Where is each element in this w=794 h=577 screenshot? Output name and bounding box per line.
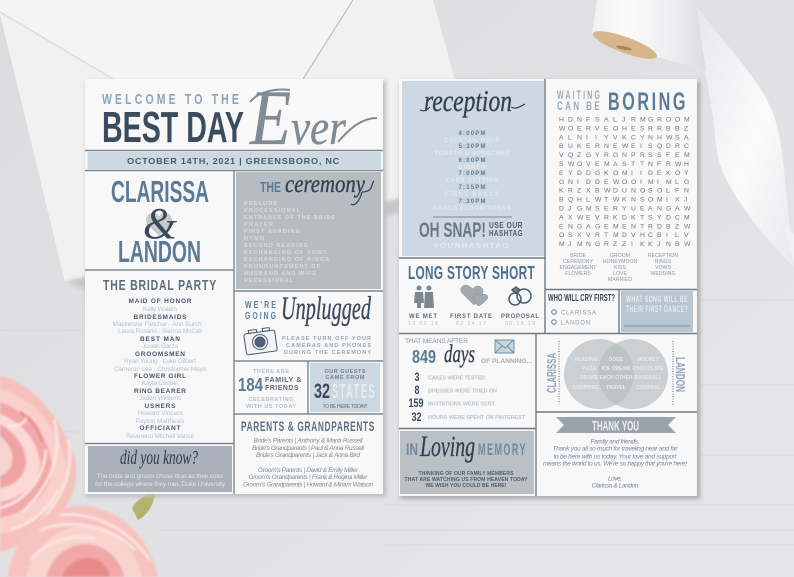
panel: planning stats: HOURS WERE SPENT ON PINTEREST (428, 415, 526, 421)
panel: parents and grandparents: Bride's Grandparents | Paul & Anna Russell (252, 445, 365, 452)
couple names: CLARISSA (111, 174, 209, 209)
panel: did you know: for the college where they met, Duke University (95, 481, 226, 488)
icon: envelope (495, 340, 514, 353)
word search grid: MJMNGRZZIKKJNBW (559, 241, 691, 248)
ribbon spool and tail (590, 0, 794, 268)
panel: the ceremony: HUSBAND AND WIFE (244, 271, 316, 277)
panel: planning stats: 3 (414, 370, 420, 384)
word list: GROOM (610, 253, 630, 259)
word search grid: ALNIIYVKCYNHWSA (559, 134, 689, 141)
panel: who will cry first: LANDON (561, 320, 590, 326)
panel: 184 family and friends (238, 369, 302, 410)
panel: the ceremony: EXCHANGING OF VOWS (244, 250, 327, 256)
panel: reception: reception (424, 83, 512, 118)
panel: in loving memory: Loving (419, 430, 475, 463)
envelope (0, 0, 455, 290)
panel: thank you (543, 417, 687, 490)
panel: unplugged: WE'RE (245, 299, 278, 311)
panel: bridal party: BEST MAN (140, 336, 180, 343)
panel: reception: #OURHASHTAG (434, 241, 510, 250)
panel: in loving memory: IN (406, 440, 418, 459)
panel: word search: BORING (608, 88, 688, 116)
panel: unplugged: PLEASE TURN OFF YOUR (282, 336, 371, 342)
panel: bridal party (103, 277, 217, 440)
panel: venn diagram: ICE CREAM (602, 366, 630, 372)
panel: parents and grandparents (241, 418, 375, 488)
panel: long story short: LONG STORY SHORT (408, 263, 535, 283)
panel: reception (402, 81, 544, 256)
panel: the ceremony: THE (260, 179, 281, 196)
leaf (132, 490, 155, 520)
panel: the ceremony: PRELUDE (244, 201, 277, 207)
word list (560, 253, 678, 283)
panel: did you know: The bride and groom chose blue as their color (96, 473, 224, 480)
panel: bridal party: THE BRIDAL PARTY (103, 277, 217, 294)
left card shadow (86, 81, 386, 497)
panel: bridal party: Reverend Mitchell Vance (126, 433, 194, 440)
panel: bridal party: Kelly Waters (143, 306, 178, 313)
panel: reception: 6:00PM (458, 158, 486, 164)
word list: BRIDE (570, 253, 586, 259)
panel: bridal party: RING BEARER (134, 388, 186, 395)
word list: RECEPTION (648, 253, 678, 259)
panel: first dance song: THEIR FIRST DANCE? (626, 304, 688, 315)
word search grid: BUKERNEWEISQDRC (559, 143, 689, 150)
panel: long story short: WE MET (409, 314, 437, 320)
panel: planning stats: INVITATIONS WERE SENT (428, 402, 496, 408)
panel: the ceremony: PROCESSIONAL (244, 208, 301, 214)
panel: bridal party: BRIDESMAIDS (134, 314, 187, 321)
panel: planning stats: CAKES WERE TESTED (428, 376, 485, 382)
panel: 32 states (310, 363, 380, 412)
panel: planning stats: 849 (412, 347, 436, 367)
date bar (88, 152, 381, 169)
panel: bridal party: Cameron Lee · Christopher Mays (114, 366, 207, 373)
panel: reception: HASHTAG (489, 229, 523, 238)
panel: left card (85, 74, 383, 494)
panel: reception: 7:15PM (458, 185, 486, 191)
panel: venn diagram: READING (574, 357, 598, 363)
panel: 32 states: TO BE HERE TODAY! (322, 404, 368, 410)
panel: planning stats: OF PLANNING... (481, 358, 532, 365)
word list: RINGS (655, 259, 672, 265)
panel: reception: 5:30PM (458, 144, 486, 150)
panel: bridal party: Howard Vincent (138, 410, 183, 417)
panel: the ceremony: ENTRANCE OF THE BRIDE (244, 215, 335, 221)
panel: bridal party: Mackenzie Fletcher · Ann Burch · (112, 321, 206, 328)
panel: 184 family and friends: THERE ARE (253, 369, 289, 375)
panel: venn diagram: CLARISSA (544, 353, 559, 393)
panel: unplugged (243, 291, 371, 356)
panel: unplugged: CAMERAS AND PHONES (286, 343, 371, 349)
panel: bridal party: USHERS (144, 403, 176, 410)
panel: reception: 7:30PM (458, 199, 486, 205)
panel: 184 family and friends: 184 (238, 375, 263, 395)
panel: thank you: Family and friends, (590, 438, 640, 446)
word list: CEREMONY (563, 259, 594, 265)
panel: long story short: 12.02.16 (408, 321, 438, 327)
panel: who will cry first (548, 293, 615, 326)
panel: bridal party: MAID OF HONOR (128, 298, 192, 305)
panel: venn diagram: CHOCOLATE (632, 366, 664, 372)
panel: 32 states: STATES (332, 381, 376, 403)
panel: reception: FIRST DANCE (445, 192, 499, 198)
panel: reception: TOASTS & SPEECHES (434, 151, 510, 157)
word list: WEDDING (650, 271, 676, 277)
panel: 184 family and friends: FRIENDS (265, 385, 299, 392)
panel: the ceremony: FIRST READING (244, 229, 300, 235)
panel: bridal party: Jaden Williams (139, 395, 182, 402)
icon: couple (414, 286, 434, 308)
panel: reception: 7:00PM (458, 171, 486, 177)
panel: venn diagram: DOGS (609, 357, 624, 363)
panel: bridal party: Payton Matthews (136, 418, 185, 425)
word search grid (559, 116, 691, 248)
panel: parents and grandparents: PARENTS & GRANDPARENTS (241, 418, 375, 434)
word search grid: ENGAGEMENTRDBZW (559, 223, 691, 230)
panel: venn diagram: PIZZA (582, 366, 597, 372)
panel: bridal party: Ryan Young · Luke Gilbert (124, 358, 196, 365)
panel: thank you: Thank you all so much for traveling near and far (552, 446, 678, 452)
word list: LOVE (613, 271, 627, 277)
panel: venn diagram: EACH OTHER (599, 375, 633, 381)
panel: bridal party: FLOWER GIRL (134, 373, 186, 380)
panel: long story short: 02.14.17 (456, 321, 486, 327)
panel: planning stats: THAT MEANS AFTER (405, 338, 468, 345)
word list: ENGAGEMENT (560, 265, 597, 271)
panel: venn diagram: HOCKEY (637, 357, 659, 363)
panel: venn diagram: TRAVEL (606, 385, 626, 391)
panel: the ceremony: EXCHANGING OF RINGS (244, 257, 329, 263)
panel: unplugged: GOING (245, 310, 278, 322)
panel: bridal party: GROOMSMEN (135, 351, 185, 358)
panel: word search: CAN BE (557, 99, 602, 113)
panel: planning stats: days (444, 341, 475, 368)
panel: planning stats: 159 (408, 396, 424, 410)
word search grid: GNIDDEWOOIMIMLG (559, 179, 689, 186)
roses (0, 376, 158, 577)
word search grid: AXWEVRKDKTSYDCM (559, 214, 690, 221)
panel: 184 family and friends: FAMILY & (265, 377, 302, 384)
panel: long story short: PROPOSAL (501, 314, 539, 320)
panel: parents and grandparents: Groom's Grandparents | Howard & Miriam Watson (243, 482, 373, 488)
word search grid: VQZGYRGNPRSSFEM (559, 152, 690, 159)
panel: reception: USE OUR (489, 221, 523, 230)
couple names: & (143, 199, 178, 248)
panel: did you know (88, 446, 232, 492)
panel: in loving memory: WE WISH YOU COULD BE HERE! (426, 483, 507, 489)
word search grid: WOERVEOHESRRBBZ (559, 125, 688, 132)
panel: bridal party: Laura Rosario · Sienna McCall (118, 328, 203, 335)
panel: in loving memory: THAT ARE WATCHING US FROM HEAVEN TODAY (404, 477, 528, 483)
panel: thank you: THANK YOU (592, 418, 639, 434)
panel: planning stats: 8 (414, 383, 420, 397)
panel: reception: OH SNAP! (419, 219, 486, 242)
panel: in loving memory: MEMORY (478, 440, 527, 459)
panel: the ceremony: SECOND READING (244, 243, 308, 249)
rose left (0, 376, 76, 552)
panel: right card (399, 79, 697, 496)
word search grid: HDNFSALJRMGROOM (559, 116, 690, 124)
panel: venn diagram: CAMPING (636, 385, 660, 391)
panel: the ceremony: HYMN (244, 236, 264, 242)
word list: MARRIED (608, 277, 632, 283)
panel: who will cry first: WHO WILL CRY FIRST? (548, 293, 615, 304)
panel: 32 states: OUR GUESTS (324, 369, 366, 375)
panel: bridal party: OFFICIANT (140, 425, 181, 432)
panel: planning stats: 32 (412, 410, 422, 424)
title: WELCOME TO THE (102, 91, 242, 108)
rose right (8, 506, 158, 577)
panel: in loving memory (400, 430, 534, 494)
panel: did you know: did you know? (120, 447, 198, 469)
panel: word search (557, 88, 691, 283)
word search grid: OSXVRTMDVHCBILV (559, 232, 689, 239)
word search grid: KRZXBWDUNOSOLFN (559, 188, 689, 195)
panel: thank you: to be here with us today. Your love and support (554, 454, 678, 460)
panel: bridal party: Kayla Cooper (142, 380, 179, 387)
panel: in loving memory: THINKING OF OUR FAMILY MEMBERS (418, 471, 514, 477)
word list: VOWS (655, 265, 671, 271)
word search grid: DJGMSERYUEANGAW (559, 206, 691, 212)
panel: thank you: Clarissa & Landon (592, 482, 639, 490)
panel: the ceremony: PRAYER (244, 222, 273, 228)
word list: FLOWERS (565, 271, 591, 277)
panel: first dance song: WHAT SONG WILL BE (626, 294, 688, 305)
panel: unplugged: Unplugged (281, 291, 371, 327)
panel: planning stats: DRESSES WERE TRIED ON (428, 388, 497, 394)
panel: long story short (408, 263, 539, 327)
panel: word search: WAITING (557, 88, 602, 102)
panel: the ceremony: RECESSIONAL (244, 278, 294, 284)
panel: 32 states: 32 (314, 380, 330, 403)
panel: long story short: FIRST DATE (450, 314, 492, 320)
panel: parents and grandparents: Bride's Parents | Anthony & Maria Russell (254, 438, 363, 444)
icon: camera (243, 327, 277, 355)
panel: venn diagram: BASEBALL (634, 375, 662, 381)
icon: hearts (461, 285, 488, 306)
panel: who will cry first: CLARISSA (561, 310, 596, 316)
panel: the ceremony: PRONOUNCEMENT OF (244, 264, 321, 270)
panel: venn diagram: DRAKE (580, 375, 599, 381)
panel: reception: DANCE FLOOR OPENS (433, 206, 511, 212)
word list: HONEYMOON (603, 259, 638, 265)
panel: bridal party: Josiah Garza (142, 343, 178, 350)
panel: venn diagram: SHOPPING (573, 385, 599, 391)
word search grid: EYDDGKOMIIDEKOY (559, 170, 689, 177)
panel: thank you: means the world to us. We're so happy that you're here! (543, 460, 687, 468)
couple names (111, 174, 209, 269)
panel: reception: DINNER (458, 165, 486, 171)
panel: long story short: 06.18.19 (505, 321, 535, 327)
word search grid: SWOVEMASTTNFRWH (559, 161, 689, 168)
panel: unplugged: DURING THE CEREMONY (284, 350, 371, 356)
panel: reception: 4:00PM (458, 131, 486, 137)
date bar: OCTOBER 14TH, 2021 | GREENSBORO, NC (127, 156, 340, 166)
panel: 184 family and friends: WITH US TODAY (246, 404, 296, 410)
word search grid: BQHLWTWKNSOMIXJ (559, 197, 687, 204)
panel: venn diagram (544, 339, 688, 409)
title (102, 74, 377, 161)
panel: reception: CAKE CUTTING (446, 178, 498, 184)
panel: 32 states: CAME FROM (326, 375, 365, 381)
panel: the ceremony (236, 171, 381, 289)
panel: first dance song (621, 291, 693, 332)
panel: 184 family and friends: CELEBRATING (248, 397, 294, 403)
panel: thank you: Love, (608, 476, 622, 482)
panel: parents and grandparents: Groom's Parents | David & Emily Miller (258, 467, 359, 474)
title: Ever (249, 74, 347, 161)
title: BEST DAY (102, 103, 244, 152)
panel: reception: COCKTAIL HOUR (444, 138, 501, 144)
panel: venn diagram: LANDON (673, 357, 688, 392)
panel: parents and grandparents: Bride's Grandparents | Jack & Anna Bird (256, 452, 360, 459)
panel: parents and grandparents: Groom's Grandparents | Frank & Regina Miller (248, 474, 368, 481)
panel: the ceremony: ceremony (285, 171, 366, 198)
right card shadow (400, 81, 700, 499)
word list: KISS (614, 265, 626, 271)
icon: rings (509, 287, 531, 305)
couple names: LANDON (118, 234, 201, 269)
panel: planning stats (405, 338, 532, 424)
